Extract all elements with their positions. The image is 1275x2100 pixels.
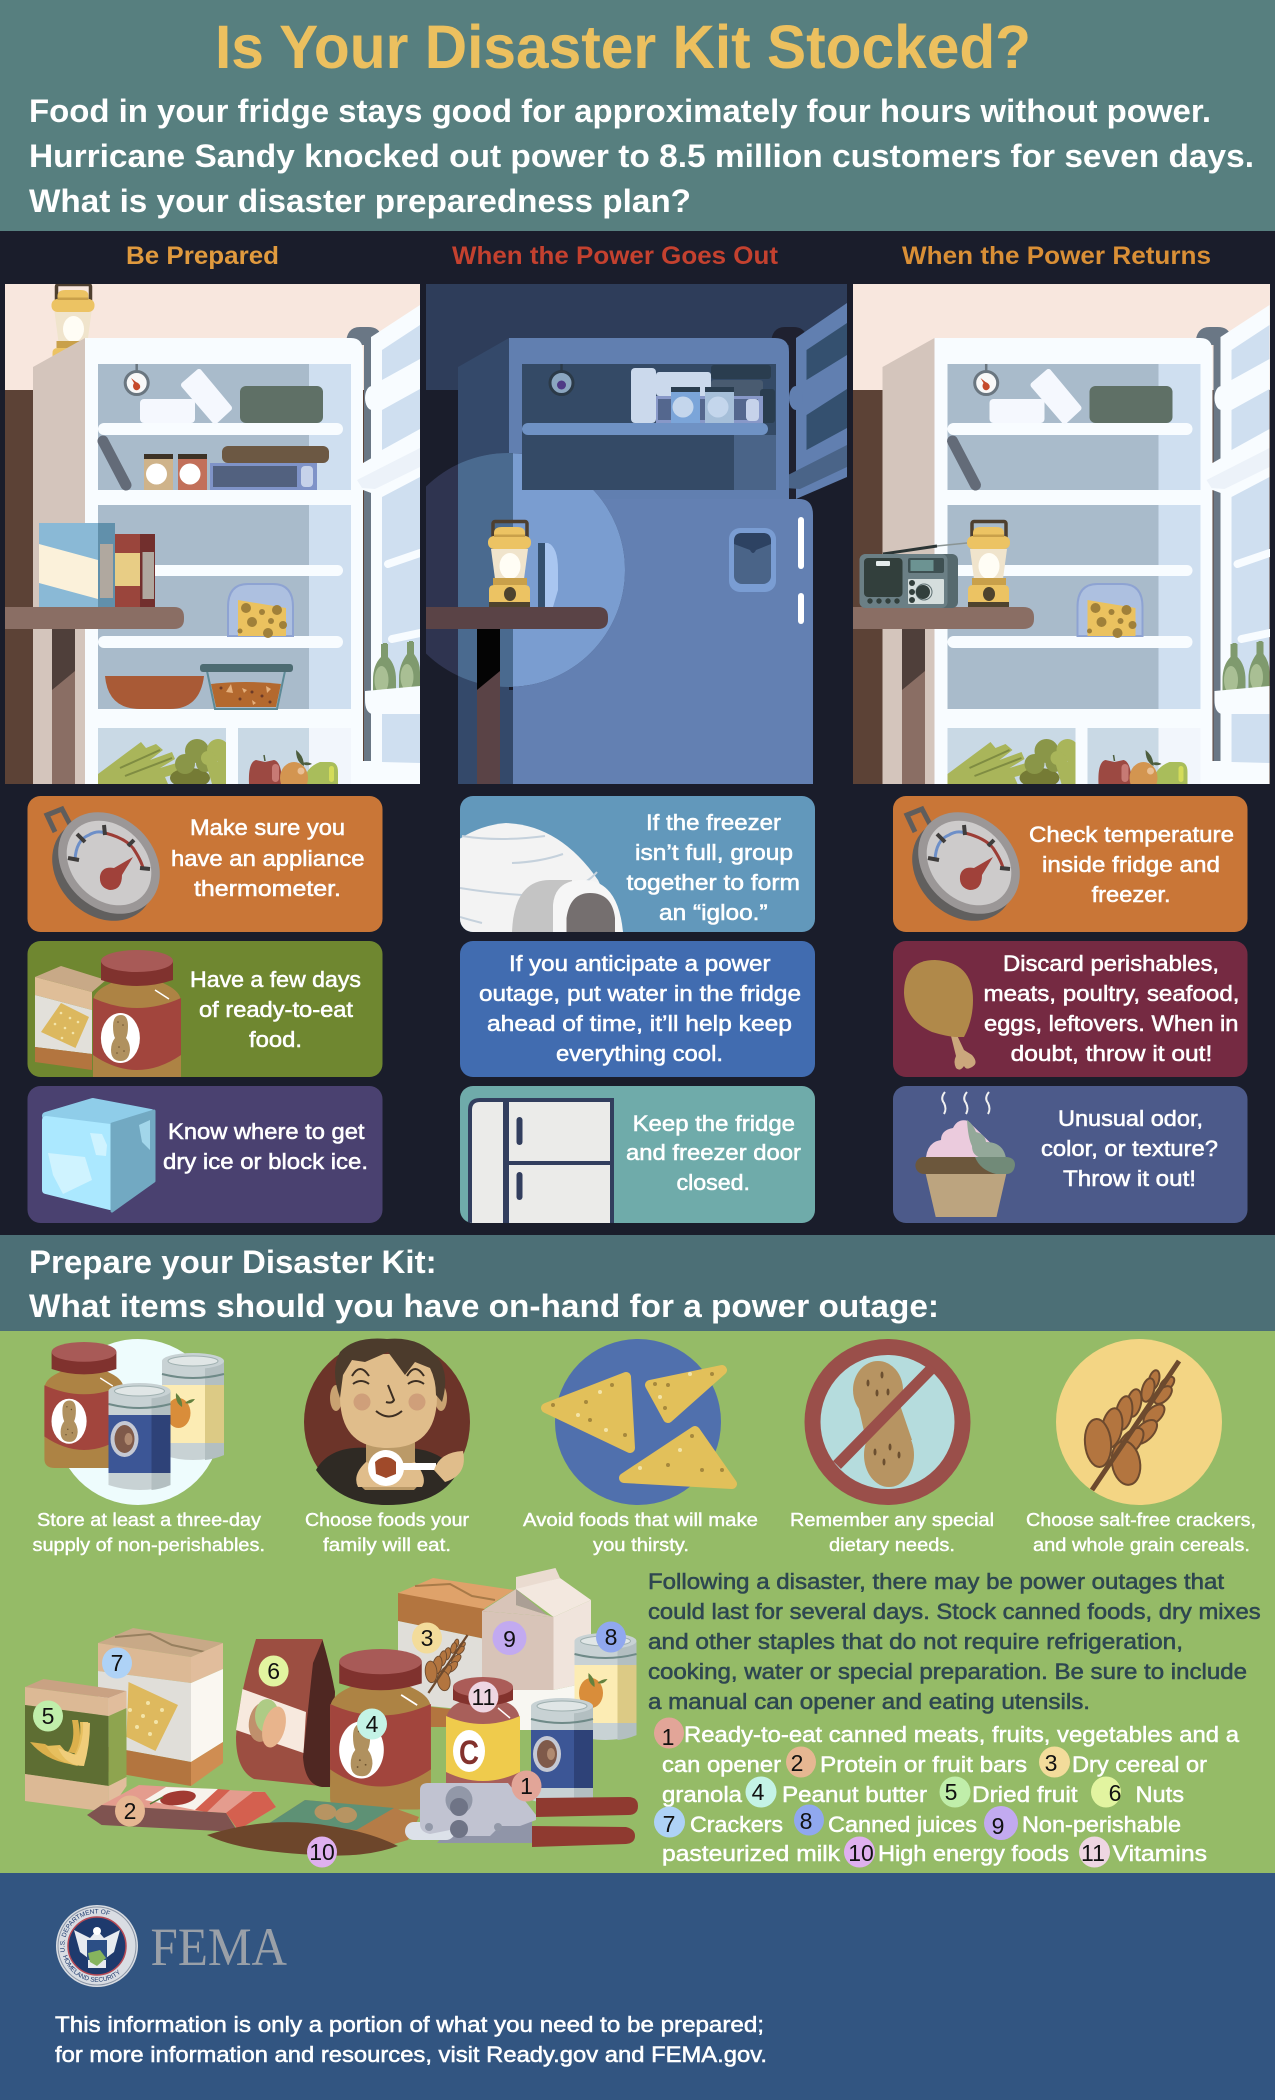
- numbered kit list: 3: [1045, 1750, 1057, 1776]
- tip: three-day supply: supply of non-perishables.: [32, 1535, 265, 1555]
- tip: salt-free crackers and cereals: and whole grain cereals.: [1033, 1535, 1250, 1555]
- red food box: [115, 534, 155, 607]
- tip card: check temperature: [892, 792, 1248, 941]
- dim thermometer: [550, 364, 573, 394]
- numbered kit list: Crackers: [690, 1812, 783, 1837]
- tip card: check temperature: Check temperature: [1029, 822, 1234, 847]
- numbered kit list: 5: [945, 1779, 957, 1805]
- panel: open fridge, be prepared: [5, 284, 420, 794]
- numbered kit list: can opener: [662, 1752, 781, 1777]
- number badges on items: 7: [111, 1650, 123, 1676]
- section heading: prepare your disaster kit: Prepare your Disaster Kit:: [29, 1244, 437, 1280]
- tip card: ice: [28, 1086, 382, 1223]
- container of granola: [200, 664, 293, 709]
- bowl: [105, 676, 204, 709]
- tip: special dietary needs: dietary needs.: [829, 1535, 955, 1555]
- tip card: ready-to-eat food: of ready-to-eat: [199, 997, 353, 1022]
- tip: special dietary needs: Remember any special: [790, 1510, 994, 1530]
- numbered kit list: 10: [848, 1840, 874, 1866]
- footer text block: [55, 2012, 767, 2067]
- item: dried fruit box: [25, 1679, 126, 1812]
- icon: ice block: [46, 1102, 154, 1211]
- tip card: water in fridge: outage, put water in the fridge: [479, 981, 801, 1006]
- numbered kit list: 2: [791, 1750, 803, 1776]
- numbered kit list: Vitamins: [1112, 1841, 1207, 1866]
- icon: lantern on top of fridge: [52, 284, 94, 356]
- text block: following a disaster: [648, 1569, 1261, 1714]
- icon: juice can: [162, 1353, 224, 1460]
- heading: Be Prepared: Be Prepared: [126, 242, 279, 270]
- tip: three-day supply: Store at least a three-day: [37, 1510, 261, 1530]
- item: vitamin bottle: [446, 1677, 520, 1800]
- header band: [0, 0, 1275, 231]
- numbered kit list: Protein or fruit bars: [820, 1752, 1027, 1777]
- kettle handle behind lantern: [545, 543, 558, 607]
- tip: special dietary needs: [790, 1339, 994, 1555]
- icon: lantern on counter: [967, 522, 1010, 607]
- tip: three-day supply: [32, 1339, 265, 1555]
- tip card: keep door closed: [460, 1086, 815, 1226]
- item: bean can: [531, 1698, 593, 1805]
- tip: salt-free crackers and cereals: Choose salt-free crackers,: [1026, 1510, 1256, 1530]
- numbered kit list: 6: [1109, 1780, 1121, 1806]
- tip card: check temperature: freezer.: [1092, 882, 1171, 907]
- counter with cabinet: [853, 607, 1034, 784]
- text block: following a disaster: Following a disaster, there may be power outages that: [648, 1569, 1224, 1594]
- tip card: unusual odor: Throw it out!: [1063, 1166, 1196, 1191]
- counter with cabinet: [5, 607, 184, 784]
- icon: fridge: [470, 1098, 612, 1226]
- icon: tortilla chips: [546, 1370, 732, 1484]
- numbered kit list: pasteurized milk: [662, 1841, 841, 1866]
- footer band: [0, 1873, 1275, 2100]
- text block: following a disaster: could last for several days. Stock canned foods, dry mixes: [648, 1599, 1261, 1624]
- number badges on items: 6: [267, 1658, 280, 1684]
- icon: peanut crossed out: [837, 1361, 933, 1487]
- intro text block: Hurricane Sandy knocked out power to 8.5 million customers for seven days.: [29, 138, 1254, 174]
- icon: radio: [860, 543, 967, 608]
- tip: avoid thirst foods: [523, 1339, 758, 1555]
- tip card: discard perishables: meats, poultry, seafood,: [984, 981, 1240, 1006]
- text block: following a disaster: and other staples that do not require refrigeration,: [648, 1629, 1183, 1654]
- icon: DHS seal: U.S. DEPARTMENT OF: [60, 1909, 110, 1952]
- fridge interior and door: [882, 305, 1270, 794]
- numbered kit list: 8: [800, 1808, 812, 1834]
- text block: following a disaster: a manual can opener and eating utensils.: [648, 1689, 1090, 1714]
- tip card: water in fridge: If you anticipate a power: [509, 951, 770, 976]
- open door: [789, 303, 847, 499]
- water dispenser: [729, 528, 776, 592]
- cereal box: [39, 523, 115, 607]
- tip card: check temperature: inside fridge and: [1042, 852, 1220, 877]
- icon: wheat: [1083, 1361, 1179, 1490]
- tip card: water in fridge: ahead of time, it’ll help keep: [487, 1011, 792, 1036]
- tip card: discard perishables: doubt, throw it out!: [1011, 1041, 1212, 1066]
- tip card: discard perishables: [893, 941, 1248, 1077]
- icon: moldy cupcake: [915, 1092, 1015, 1217]
- tip card: unusual odor: [893, 1086, 1248, 1223]
- intro text block: [29, 93, 1254, 219]
- icon: peanut butter jar: [93, 950, 181, 1090]
- item: cereal box: [398, 1578, 514, 1727]
- tip card: discard perishables: Discard perishables,: [1003, 951, 1219, 976]
- tip card: ready-to-eat food: food.: [249, 1027, 302, 1052]
- dim shelf food: [631, 365, 775, 423]
- tip card: ice: dry ice or block ice.: [163, 1149, 368, 1174]
- panel: open fridge, power returns: [853, 284, 1270, 794]
- tip card: water in fridge: everything cool.: [556, 1041, 723, 1066]
- number badges on items: [33, 1621, 626, 1868]
- item: protein bar: [87, 1785, 276, 1832]
- tip: foods your family will eat: Choose foods your: [305, 1510, 469, 1530]
- section heading: prepare your disaster kit: What items should you have on-hand for a power outage:: [29, 1288, 939, 1324]
- numbered kit list: Dried fruit: [972, 1782, 1078, 1807]
- tip: avoid thirst foods: Avoid foods that will make: [523, 1510, 758, 1530]
- number badges on items: 2: [124, 1798, 136, 1824]
- icon: DHS seal: [56, 1905, 138, 1987]
- number badges on items: 8: [605, 1624, 617, 1650]
- icon: thermometer: [892, 792, 1040, 941]
- counter with cabinet: [426, 607, 608, 784]
- icon: thermometer: [32, 792, 180, 941]
- icon: igloo: [458, 823, 623, 932]
- fridge interior and door: [33, 305, 420, 794]
- numbered kit list: High energy foods: [878, 1841, 1069, 1866]
- tip card: keep door closed: and freezer door: [626, 1140, 801, 1165]
- item: high energy food pack: [207, 1800, 419, 1856]
- tip card: unusual odor: color, or texture?: [1041, 1136, 1218, 1161]
- footer text block: This information is only a portion of what you need to be prepared;: [55, 2012, 764, 2037]
- item: crackers box: [98, 1628, 223, 1786]
- tip: foods your family will eat: [304, 1339, 470, 1555]
- item: nuts bag: [236, 1639, 335, 1787]
- title: Is Your Disaster Kit Stocked?: [215, 13, 1031, 81]
- icon: DHS seal: HOMELAND SECURITY: [63, 1955, 120, 1982]
- tip card: igloo: If the freezer: [646, 810, 781, 835]
- tip card: thermometer: [28, 792, 382, 941]
- icon: lantern on counter: [488, 522, 531, 607]
- section heading: prepare your disaster kit: [0, 1235, 1275, 1331]
- number badges on items: 10: [309, 1839, 335, 1865]
- intro text block: Food in your fridge stays good for approximately four hours without power.: [29, 93, 1211, 129]
- icon: person eating: [316, 1339, 464, 1505]
- lantern light glow: [426, 453, 625, 687]
- tip card: ready-to-eat food: Have a few days: [190, 967, 361, 992]
- number badges on items: 9: [503, 1626, 516, 1652]
- tip card: igloo: [458, 796, 815, 932]
- icon: bean can: [108, 1383, 170, 1490]
- tip card: keep door closed: closed.: [676, 1170, 750, 1195]
- numbered kit list: 1: [662, 1724, 674, 1750]
- FEMA wordmark: FEMA: [150, 1917, 287, 1977]
- tip: foods your family will eat: family will eat.: [323, 1535, 451, 1555]
- numbered kit list: 4: [752, 1779, 765, 1805]
- icon: crackers box: [35, 966, 106, 1070]
- item: milk carton: [482, 1568, 591, 1730]
- fridge interior dark: [522, 364, 776, 490]
- numbered kit list: granola: [662, 1782, 743, 1807]
- numbered kit list: Nuts: [1136, 1782, 1184, 1807]
- tip card: thermometer: Make sure you: [190, 815, 345, 840]
- tip card: ready-to-eat food: [28, 941, 382, 1090]
- intro text block: What is your disaster preparedness plan?: [29, 183, 691, 219]
- panel: closed fridge, power out: [391, 284, 847, 784]
- tip card: thermometer: have an appliance: [171, 846, 364, 871]
- heading: When the Power Goes Out: When the Power Goes Out: [452, 242, 779, 270]
- footer text block: for more information and resources, visit Ready.gov and FEMA.gov.: [55, 2042, 767, 2067]
- item: vitamin bottle: C: [459, 1734, 479, 1772]
- numbered kit list: 9: [992, 1813, 1004, 1839]
- numbered kit list: [654, 1718, 1240, 1868]
- number badges on items: 3: [421, 1625, 433, 1651]
- tip: salt-free crackers and cereals: [1026, 1339, 1256, 1555]
- numbered kit list: 11: [1081, 1840, 1105, 1866]
- tip card: water in fridge: [460, 941, 815, 1077]
- illustration: disaster kit items: [25, 1568, 638, 1868]
- numbered kit list: Dry cereal or: [1072, 1752, 1207, 1777]
- tip card: igloo: isn’t full, group: [635, 840, 793, 865]
- tip: avoid thirst foods: you thirsty.: [593, 1535, 689, 1555]
- item: can opener: [405, 1783, 638, 1847]
- tip card: discard perishables: eggs, leftovers. When in: [984, 1011, 1238, 1036]
- item: juice can: [574, 1633, 636, 1740]
- panel: green kit section: [0, 1331, 1275, 1873]
- number badges on items: 4: [366, 1711, 379, 1737]
- number badges on items: 5: [42, 1703, 54, 1729]
- icon: peanut butter jar: [44, 1342, 124, 1468]
- number badges on items: 11: [471, 1684, 495, 1710]
- numbered kit list: 7: [663, 1811, 675, 1837]
- item: peanut butter jar: [330, 1649, 431, 1809]
- heading: When the Power Returns: When the Power Returns: [902, 242, 1211, 270]
- text block: following a disaster: cooking, water or special preparation. Be sure to include: [648, 1659, 1247, 1684]
- tip card: igloo: an “igloo.”: [659, 900, 768, 925]
- tip card: keep door closed: Keep the fridge: [633, 1111, 795, 1136]
- tip card: ice: Know where to get: [168, 1119, 364, 1144]
- freezer door handles: [798, 517, 804, 624]
- numbered kit list: Peanut butter: [782, 1782, 927, 1807]
- number badges on items: 1: [520, 1773, 533, 1799]
- numbered kit list: Ready-to-eat canned meats, fruits, vegetables and a: [684, 1722, 1240, 1747]
- numbered kit list: Canned juices: [828, 1812, 977, 1837]
- tip card: thermometer: thermometer.: [194, 876, 341, 901]
- shelf food: jars and boxes: [144, 446, 329, 490]
- tip card: igloo: together to form: [626, 870, 800, 895]
- tip card: unusual odor: Unusual odor,: [1058, 1106, 1203, 1131]
- icon: chicken drumstick: [904, 960, 976, 1070]
- numbered kit list: Non-perishable: [1022, 1812, 1181, 1837]
